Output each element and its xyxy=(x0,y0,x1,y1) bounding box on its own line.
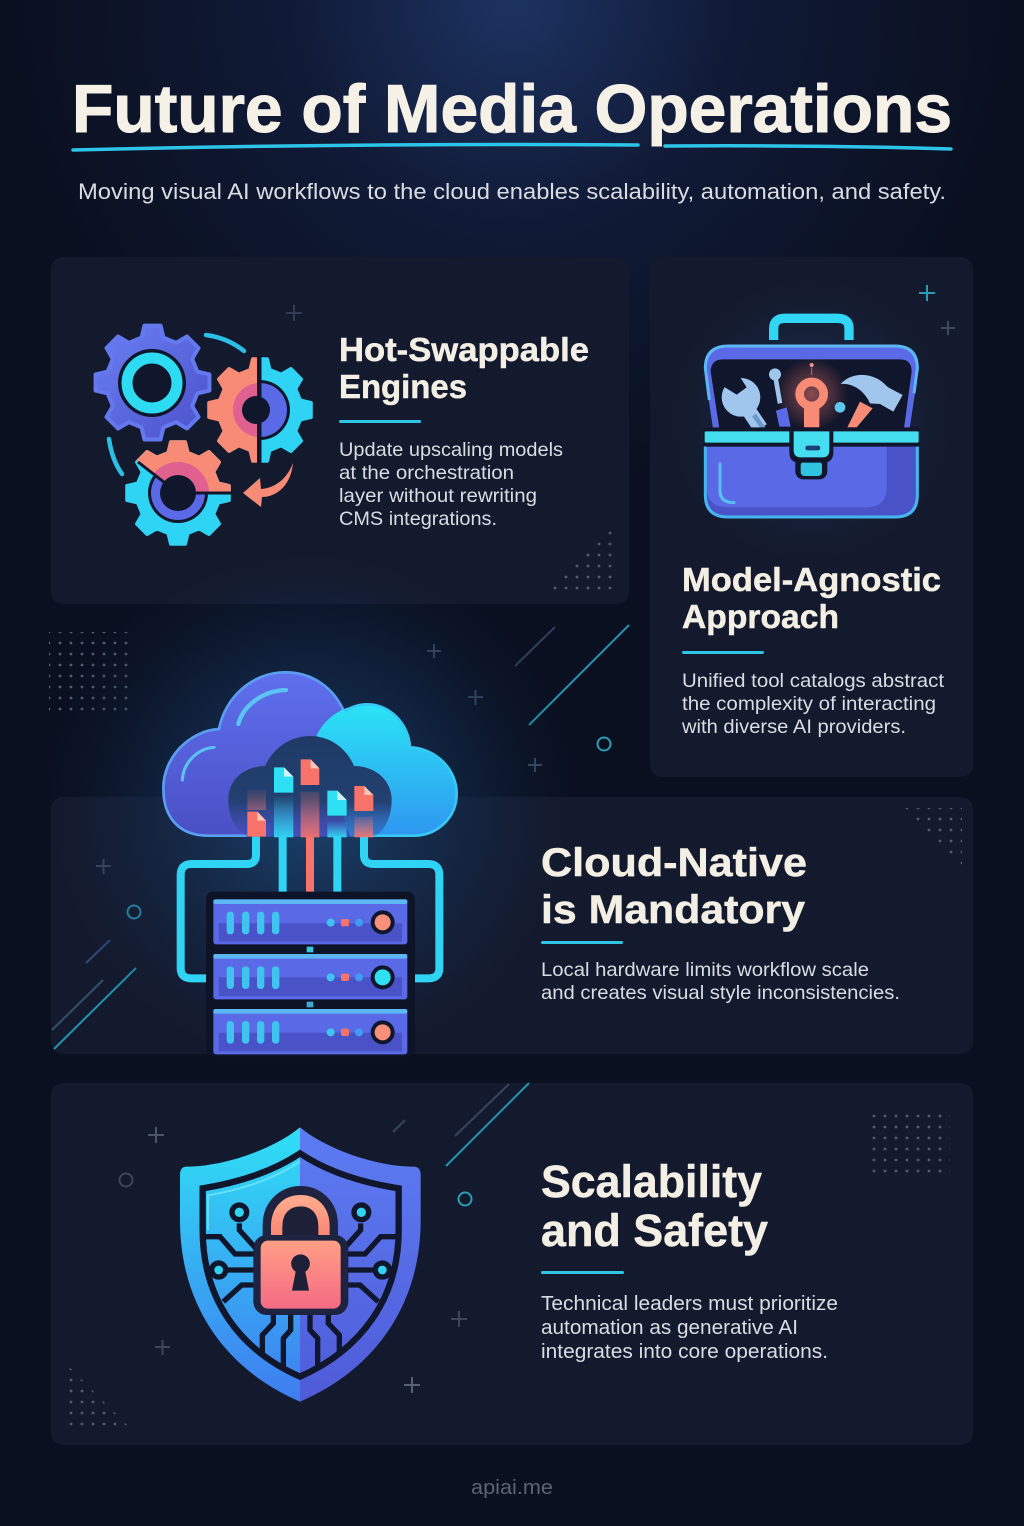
lid xyxy=(704,345,919,431)
heading: scalability: Scalability xyxy=(541,1156,762,1207)
top glow xyxy=(0,0,1024,520)
decorative plus marks xyxy=(919,285,955,335)
server stack frame xyxy=(206,892,415,1057)
server 2 xyxy=(213,954,407,999)
body text xyxy=(339,439,563,530)
body text: scalability: automation as generative AI xyxy=(541,1317,798,1339)
blue dot xyxy=(835,402,845,413)
body text: Unified tool catalogs abstract xyxy=(682,670,945,692)
accent line: scalability xyxy=(541,1271,624,1274)
cloud highlights xyxy=(182,690,286,780)
icon: shield with lock xyxy=(180,1127,421,1402)
base xyxy=(704,443,919,518)
decoration: panel dots xyxy=(905,808,962,865)
heading: cloud-native: Cloud-Native xyxy=(541,841,807,885)
decoration: cloud section marks xyxy=(52,625,629,1049)
heading: cloud-native: is Mandatory xyxy=(541,888,806,932)
body text: scalability: integrates into core operations. xyxy=(541,1341,828,1363)
body text: CMS integrations. xyxy=(339,508,497,530)
body text: scalability: Technical leaders must prioritize xyxy=(541,1293,838,1315)
cloud right xyxy=(317,704,457,837)
arcs xyxy=(109,335,244,474)
gear blue xyxy=(96,326,209,439)
icon: gears xyxy=(96,326,311,544)
key xyxy=(800,363,824,427)
interior xyxy=(711,359,912,428)
decoration: left dot grid xyxy=(49,632,131,712)
heading: Hot-Swappable xyxy=(339,332,589,369)
arrow xyxy=(243,463,293,507)
connector xyxy=(307,1002,313,1007)
body text: layer without rewriting xyxy=(339,485,537,507)
body text: Update upscaling models xyxy=(339,439,563,461)
dot grid xyxy=(548,525,616,591)
gear bottom xyxy=(127,442,233,544)
heading: Approach xyxy=(682,599,839,636)
icon glow xyxy=(651,260,972,580)
files xyxy=(247,759,373,837)
lock xyxy=(253,1188,348,1315)
circuits xyxy=(205,1223,397,1368)
heading: Model-Agnostic xyxy=(682,562,941,599)
handle xyxy=(774,318,849,340)
key glow xyxy=(775,357,848,431)
subtitle: Moving visual AI workflows to the cloud enables scalability, automation, and safety. xyxy=(78,179,946,204)
screwdriver xyxy=(769,368,791,427)
heading xyxy=(339,332,589,406)
title underline xyxy=(73,145,951,150)
inner cloud xyxy=(228,736,392,837)
circuit nodes xyxy=(212,1205,389,1277)
footer: apiai.me xyxy=(471,1477,553,1499)
panel background xyxy=(650,257,973,777)
panel: cloud-native is mandatory xyxy=(51,797,973,1054)
decoration: safety panel marks xyxy=(120,1083,529,1393)
panel: scalability and safety xyxy=(51,1083,973,1445)
hammer xyxy=(841,375,903,427)
gear split xyxy=(209,356,311,464)
icon: cloud and servers xyxy=(163,672,457,1057)
clasp xyxy=(789,428,833,479)
band xyxy=(703,427,919,447)
streams xyxy=(247,790,373,837)
body text: cloud-native xyxy=(541,959,900,1004)
panel: hot-swappable engines xyxy=(51,257,629,604)
server 1 xyxy=(213,899,407,944)
heading: cloud-native xyxy=(541,841,807,932)
tools xyxy=(713,363,903,428)
accent line: cloud-native xyxy=(541,941,623,944)
server 3 xyxy=(213,1009,407,1054)
title: Future of Media Operations xyxy=(72,71,952,147)
wrench xyxy=(713,367,763,428)
body text: the complexity of interacting xyxy=(682,693,936,715)
heading: scalability xyxy=(541,1156,768,1256)
heading: scalability: and Safety xyxy=(541,1205,768,1256)
connector xyxy=(307,947,313,952)
decorative plus xyxy=(286,305,302,321)
heading: Engines xyxy=(339,369,467,406)
connectors xyxy=(181,835,439,978)
shield inner outline xyxy=(203,1153,399,1377)
body text: cloud-native: Local hardware limits workflow scale xyxy=(541,959,869,981)
body text: scalability xyxy=(541,1293,838,1363)
icon glow: cloud xyxy=(40,540,580,1054)
heading xyxy=(682,562,941,636)
panel background xyxy=(51,257,629,604)
accent line xyxy=(339,420,421,423)
shield body xyxy=(180,1127,421,1402)
body text: with diverse AI providers. xyxy=(681,716,906,738)
body text: at the orchestration xyxy=(339,462,514,484)
body text: cloud-native: and creates visual style inconsistencies. xyxy=(541,982,900,1004)
panel: model-agnostic approach xyxy=(650,257,973,777)
icon: toolbox xyxy=(703,318,919,518)
cloud left xyxy=(163,672,363,837)
body text xyxy=(681,670,945,738)
accent line xyxy=(682,651,764,654)
decoration: safety panel dots xyxy=(66,1107,950,1430)
